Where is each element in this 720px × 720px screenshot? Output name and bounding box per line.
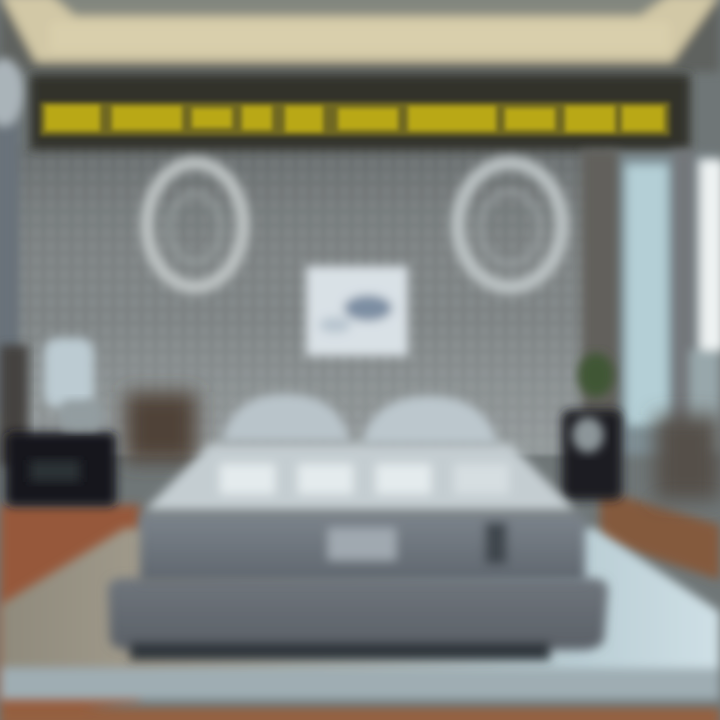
right nightstand and plant [562,353,720,500]
floor [0,490,720,720]
pillows [222,394,498,444]
left wall edge [0,58,24,410]
framed artwork [306,266,408,356]
header beam with yellow band [30,74,690,150]
wall decor: left oval [147,163,243,287]
mattress side [140,514,585,582]
bed base [108,578,608,660]
rug [0,528,720,700]
left nightstand and lamp [0,338,197,506]
bed [108,394,608,660]
yellow blotches [45,105,664,132]
ceiling [0,0,720,72]
back wall with grid texture [14,145,604,455]
right side window and column [582,150,720,455]
wall decor: right oval [458,163,562,287]
mattress top [145,444,575,510]
